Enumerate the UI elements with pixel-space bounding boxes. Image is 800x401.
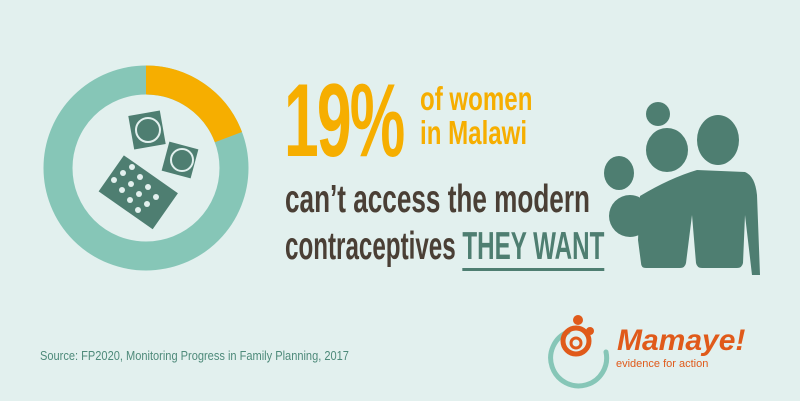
main text line 1: can’t access the modern [285,178,590,221]
source: Source: FP2020, Monitoring Progress in Family Planning, 2017 [40,348,349,363]
subheading: in Malawi [420,114,527,151]
main text line 2: contraceptives THEY WANT [285,225,604,268]
logo: Mamaye! [617,324,745,357]
icon: family [604,102,760,275]
logo [551,315,745,386]
subheading [420,80,532,151]
icon: pill packs [97,109,198,231]
subheading: of women [420,80,532,117]
headline stat: 19% [284,63,403,179]
logo: evidence for action [616,358,708,370]
